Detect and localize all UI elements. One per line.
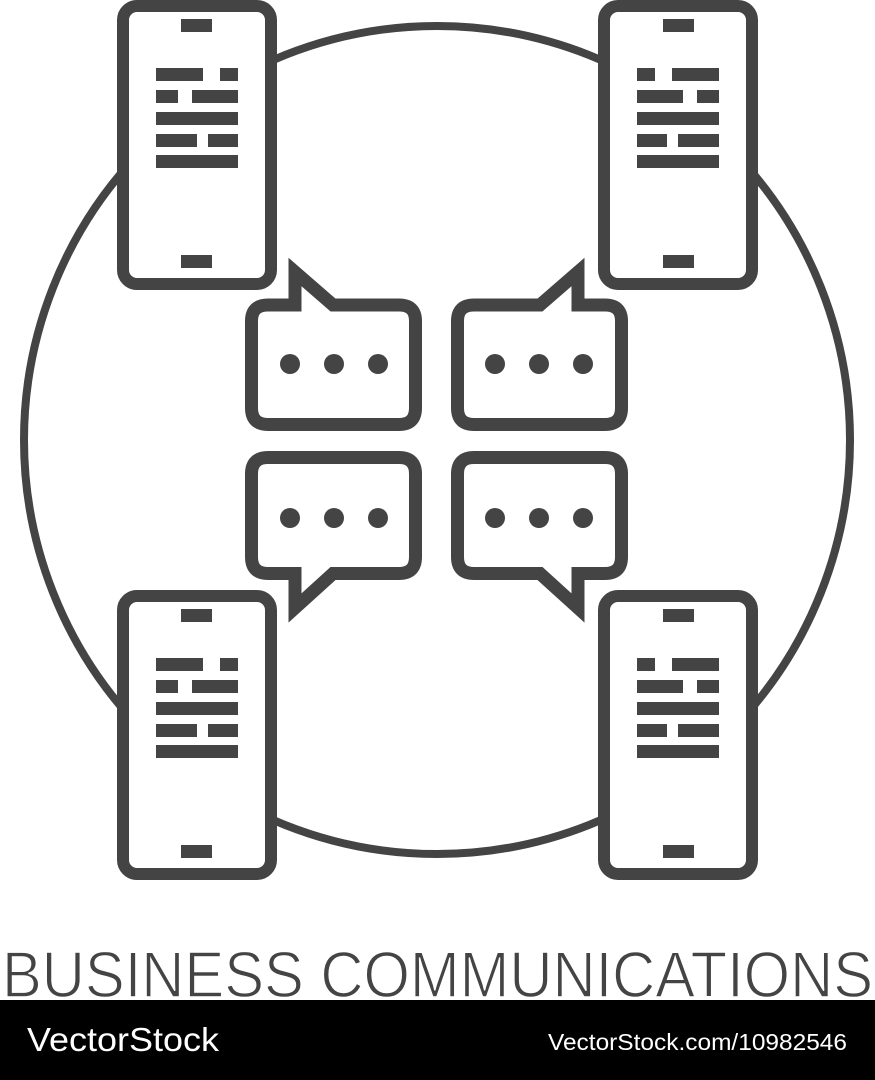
footer url: VectorStock.com/10982546: [548, 1029, 847, 1055]
footer bar: [0, 1000, 875, 1080]
phone: bottom right: [604, 596, 752, 874]
bubble: bottom left: [252, 458, 416, 608]
phone: top right: [604, 6, 752, 284]
bubble: top right: [458, 272, 622, 424]
footer logo text: VectorStock: [27, 1021, 220, 1058]
phone: bottom left: [123, 596, 271, 874]
bubble: top left: [252, 272, 416, 424]
phone: top left: [123, 6, 271, 284]
circle: [24, 26, 850, 854]
bubble: bottom right: [458, 458, 622, 608]
